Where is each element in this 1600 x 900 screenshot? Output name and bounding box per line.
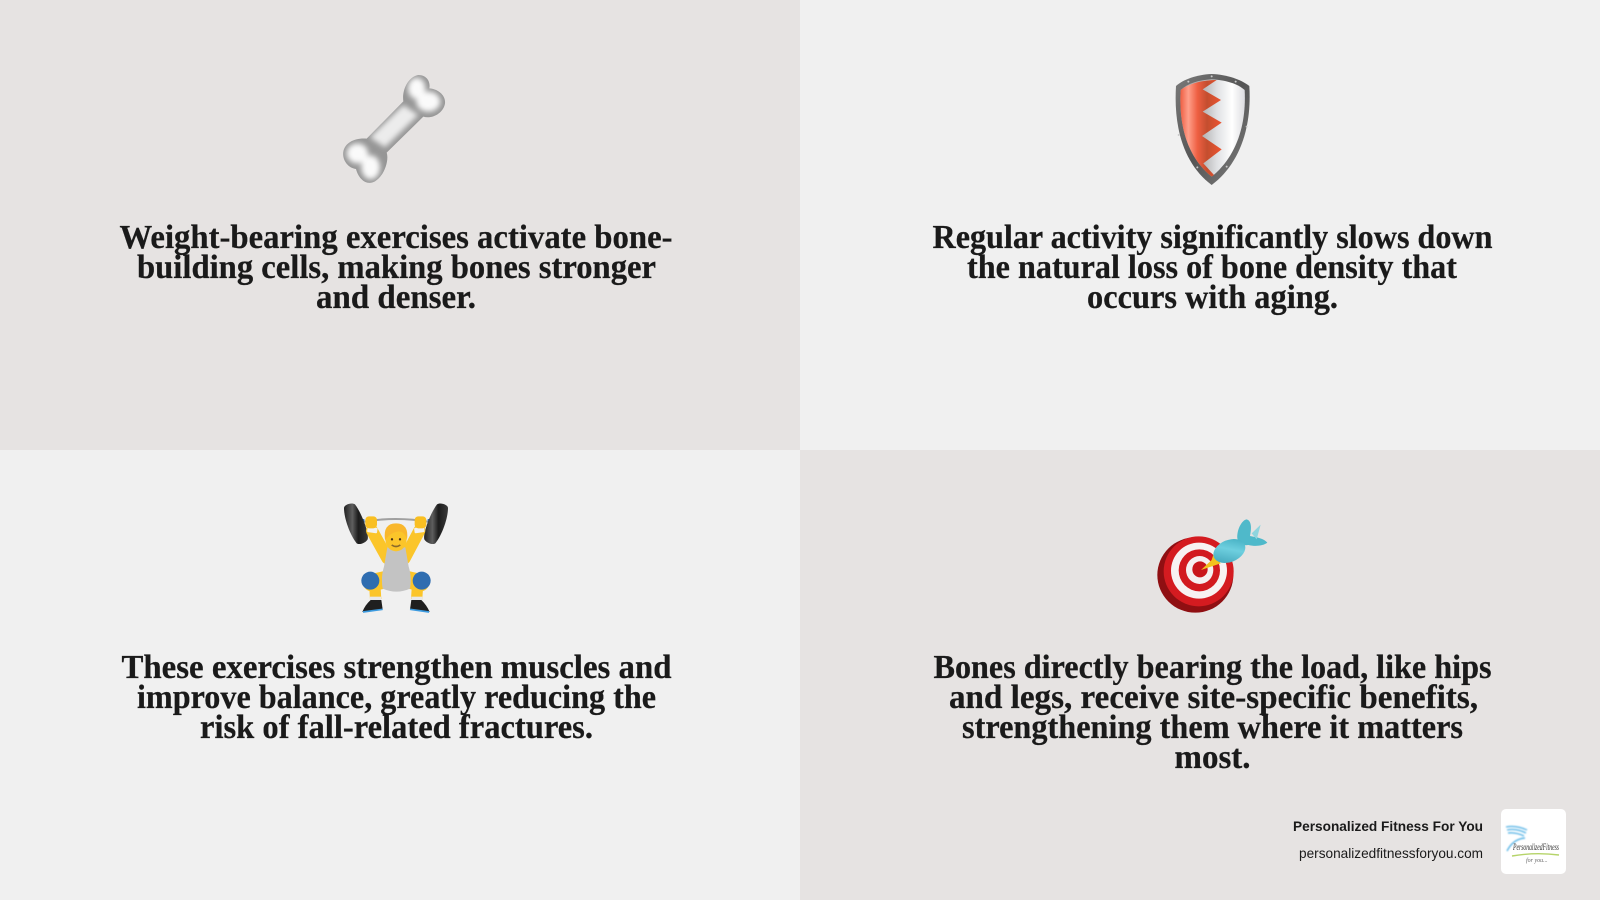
heading: site-specific text	[934, 649, 1492, 776]
heading: bone-building text: Weight-bearing exercises activate bone-	[120, 219, 672, 256]
panel: slows density loss	[800, 0, 1600, 450]
logo card: PersonalizedFitness	[1512, 842, 1559, 852]
heading: muscle text: These exercises strengthen muscles and	[122, 649, 672, 686]
brand name: Personalized Fitness For You	[1293, 818, 1483, 834]
heading: site-specific text: most.	[1174, 739, 1250, 776]
heading: bone-building text: and denser.	[316, 279, 476, 316]
logo card	[1501, 809, 1566, 874]
logo card: for you...	[1526, 857, 1548, 864]
heading: muscle text	[122, 649, 672, 746]
heading: density text: the natural loss of bone density that	[967, 249, 1458, 286]
heading: density text: occurs with aging.	[1087, 279, 1338, 316]
heading: bone-building text: building cells, making bones stronger	[137, 249, 656, 286]
website: personalizedfitnessforyou.com	[1299, 845, 1483, 861]
panel: bone-building cells	[0, 0, 800, 450]
icon: shield	[1176, 74, 1250, 185]
heading: density text: Regular activity significantly slows down	[932, 219, 1493, 256]
heading: bone-building text	[120, 219, 672, 316]
heading: muscle text: risk of fall-related fractures.	[200, 709, 593, 746]
heading: density text	[932, 219, 1493, 316]
icon: weightlifter	[344, 503, 448, 612]
icon: bone	[343, 75, 445, 183]
heading: site-specific text: strengthening them where it matters	[962, 709, 1463, 746]
footer: brand name and website	[1293, 818, 1483, 861]
heading: muscle text: improve balance, greatly reducing the	[137, 679, 656, 716]
heading: site-specific text: and legs, receive site-specific benefits,	[949, 679, 1478, 716]
panel: site-specific benefits	[800, 450, 1600, 900]
heading: site-specific text: Bones directly bearing the load, like hips	[934, 649, 1492, 686]
icon: target with dart	[1157, 519, 1267, 613]
panel: muscle and balance	[0, 450, 800, 900]
